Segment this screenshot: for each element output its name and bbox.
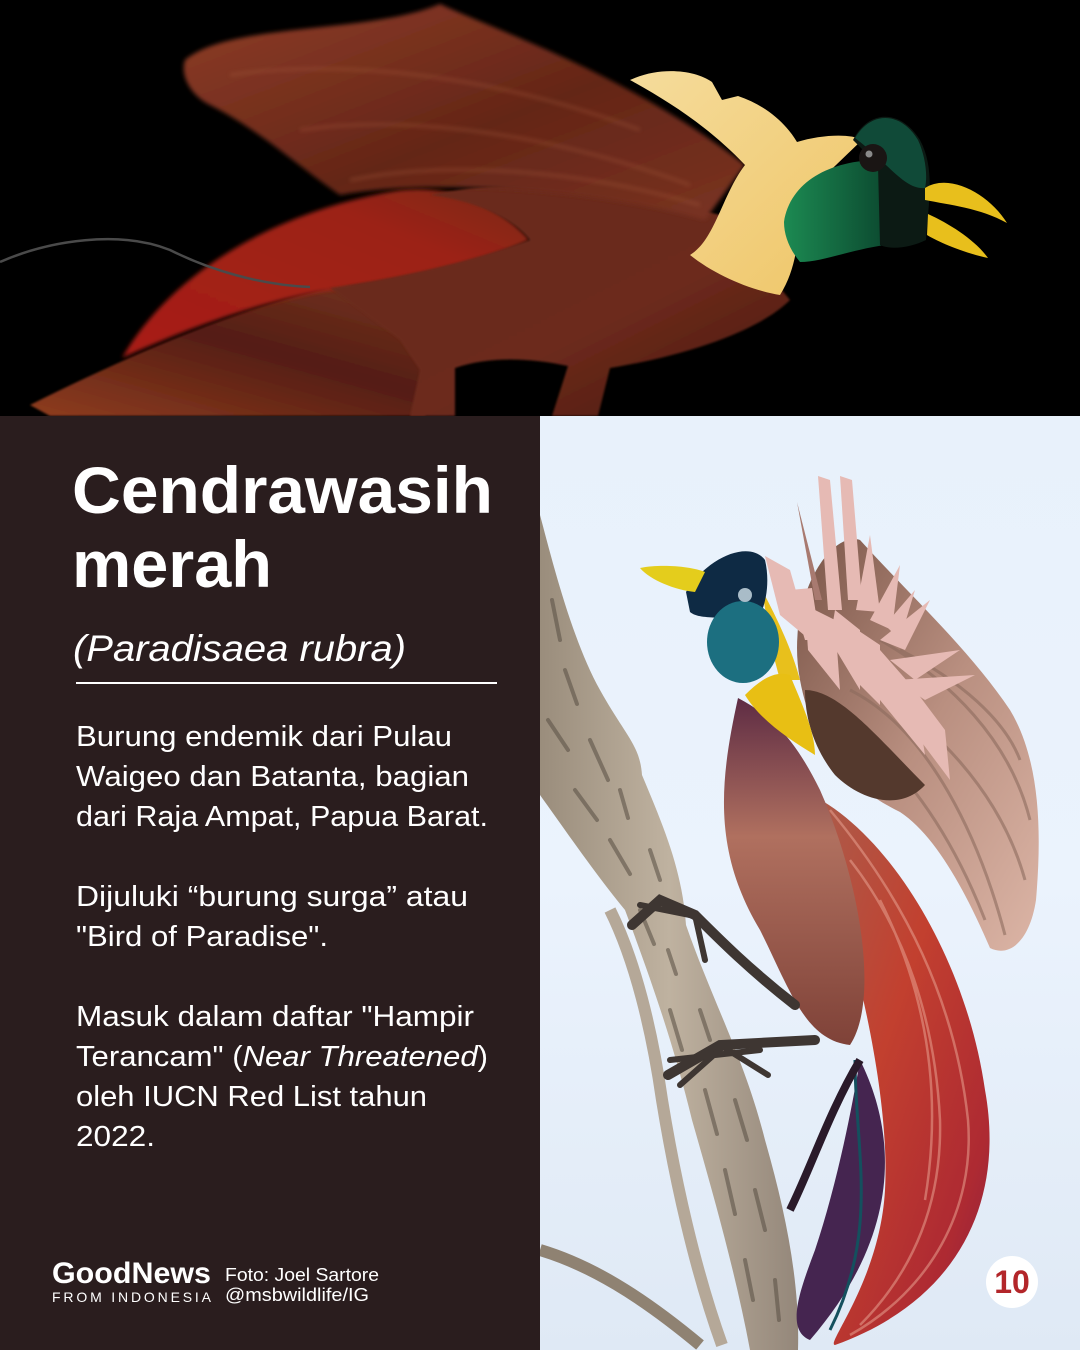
yellow nape and neck patch [764,597,800,680]
lower tail feathers [30,288,426,416]
text block: endemic range [76,721,488,833]
body [330,186,790,416]
thin branch [610,910,722,1345]
green throat [784,160,885,262]
text block: endemic range: Burung endemik dari Pulau [76,721,452,753]
divider [76,682,497,684]
yellow collar [630,71,862,295]
logo: GoodNews from Indonesia [52,1257,212,1305]
head [686,551,768,618]
text block: nickname [76,881,468,953]
red plume [122,189,530,358]
subtitle: scientific name: (Paradisaea rubra) [73,628,406,669]
logo: GoodNews from Indonesia: GoodNews [52,1257,211,1290]
teal throat [707,601,779,683]
text block: conservation status: oleh IUCN Red List tahun [76,1081,427,1113]
wire tail [830,1060,861,1330]
title [72,453,493,601]
title: Cendrawasih [72,453,493,527]
text block: nickname: Dijuluki “burung surga” atau [76,881,468,913]
photo: red bird of paradise on black background [0,0,1080,416]
beak [925,183,1007,223]
dark lower plume [797,1060,885,1340]
photo credit: @msbwildlife/IG [225,1285,369,1305]
text block: endemic range: dari Raja Ampat, Papua Barat. [76,801,488,833]
main branch [540,515,798,1350]
panel: dark text background [0,416,540,1350]
text block: conservation status: 2022. [76,1121,155,1153]
photo credit [225,1265,379,1305]
brown shoulder [805,690,925,800]
text block: nickname: "Bird of Paradise". [76,921,328,953]
display wing [797,539,1039,951]
lower branch [540,1250,700,1345]
pink feather fan [765,476,975,780]
photo credit: Foto: Joel Sartore [225,1265,379,1285]
head [853,117,930,248]
tail plume [825,802,990,1345]
title: merah [72,527,272,601]
body [724,698,864,1045]
photo: perched bird displaying wings against pale sky [540,416,1080,1350]
wire tail [0,239,310,287]
text block: conservation status: Terancam" ( Near Threatened ) [76,1041,488,1073]
text block: endemic range: Waigeo dan Batanta, bagian [76,761,469,793]
text block: conservation status [76,1001,488,1153]
eye [738,588,752,602]
text block: conservation status: Masuk dalam daftar "Hampir [76,1001,474,1033]
upper wing [184,4,745,220]
beak [640,566,705,592]
page number badge [986,1256,1038,1308]
feet and legs [632,900,815,1085]
logo: GoodNews from Indonesia: FROM INDONESIA [52,1289,212,1305]
page number badge: 10 [994,1264,1030,1300]
eye [859,144,887,172]
